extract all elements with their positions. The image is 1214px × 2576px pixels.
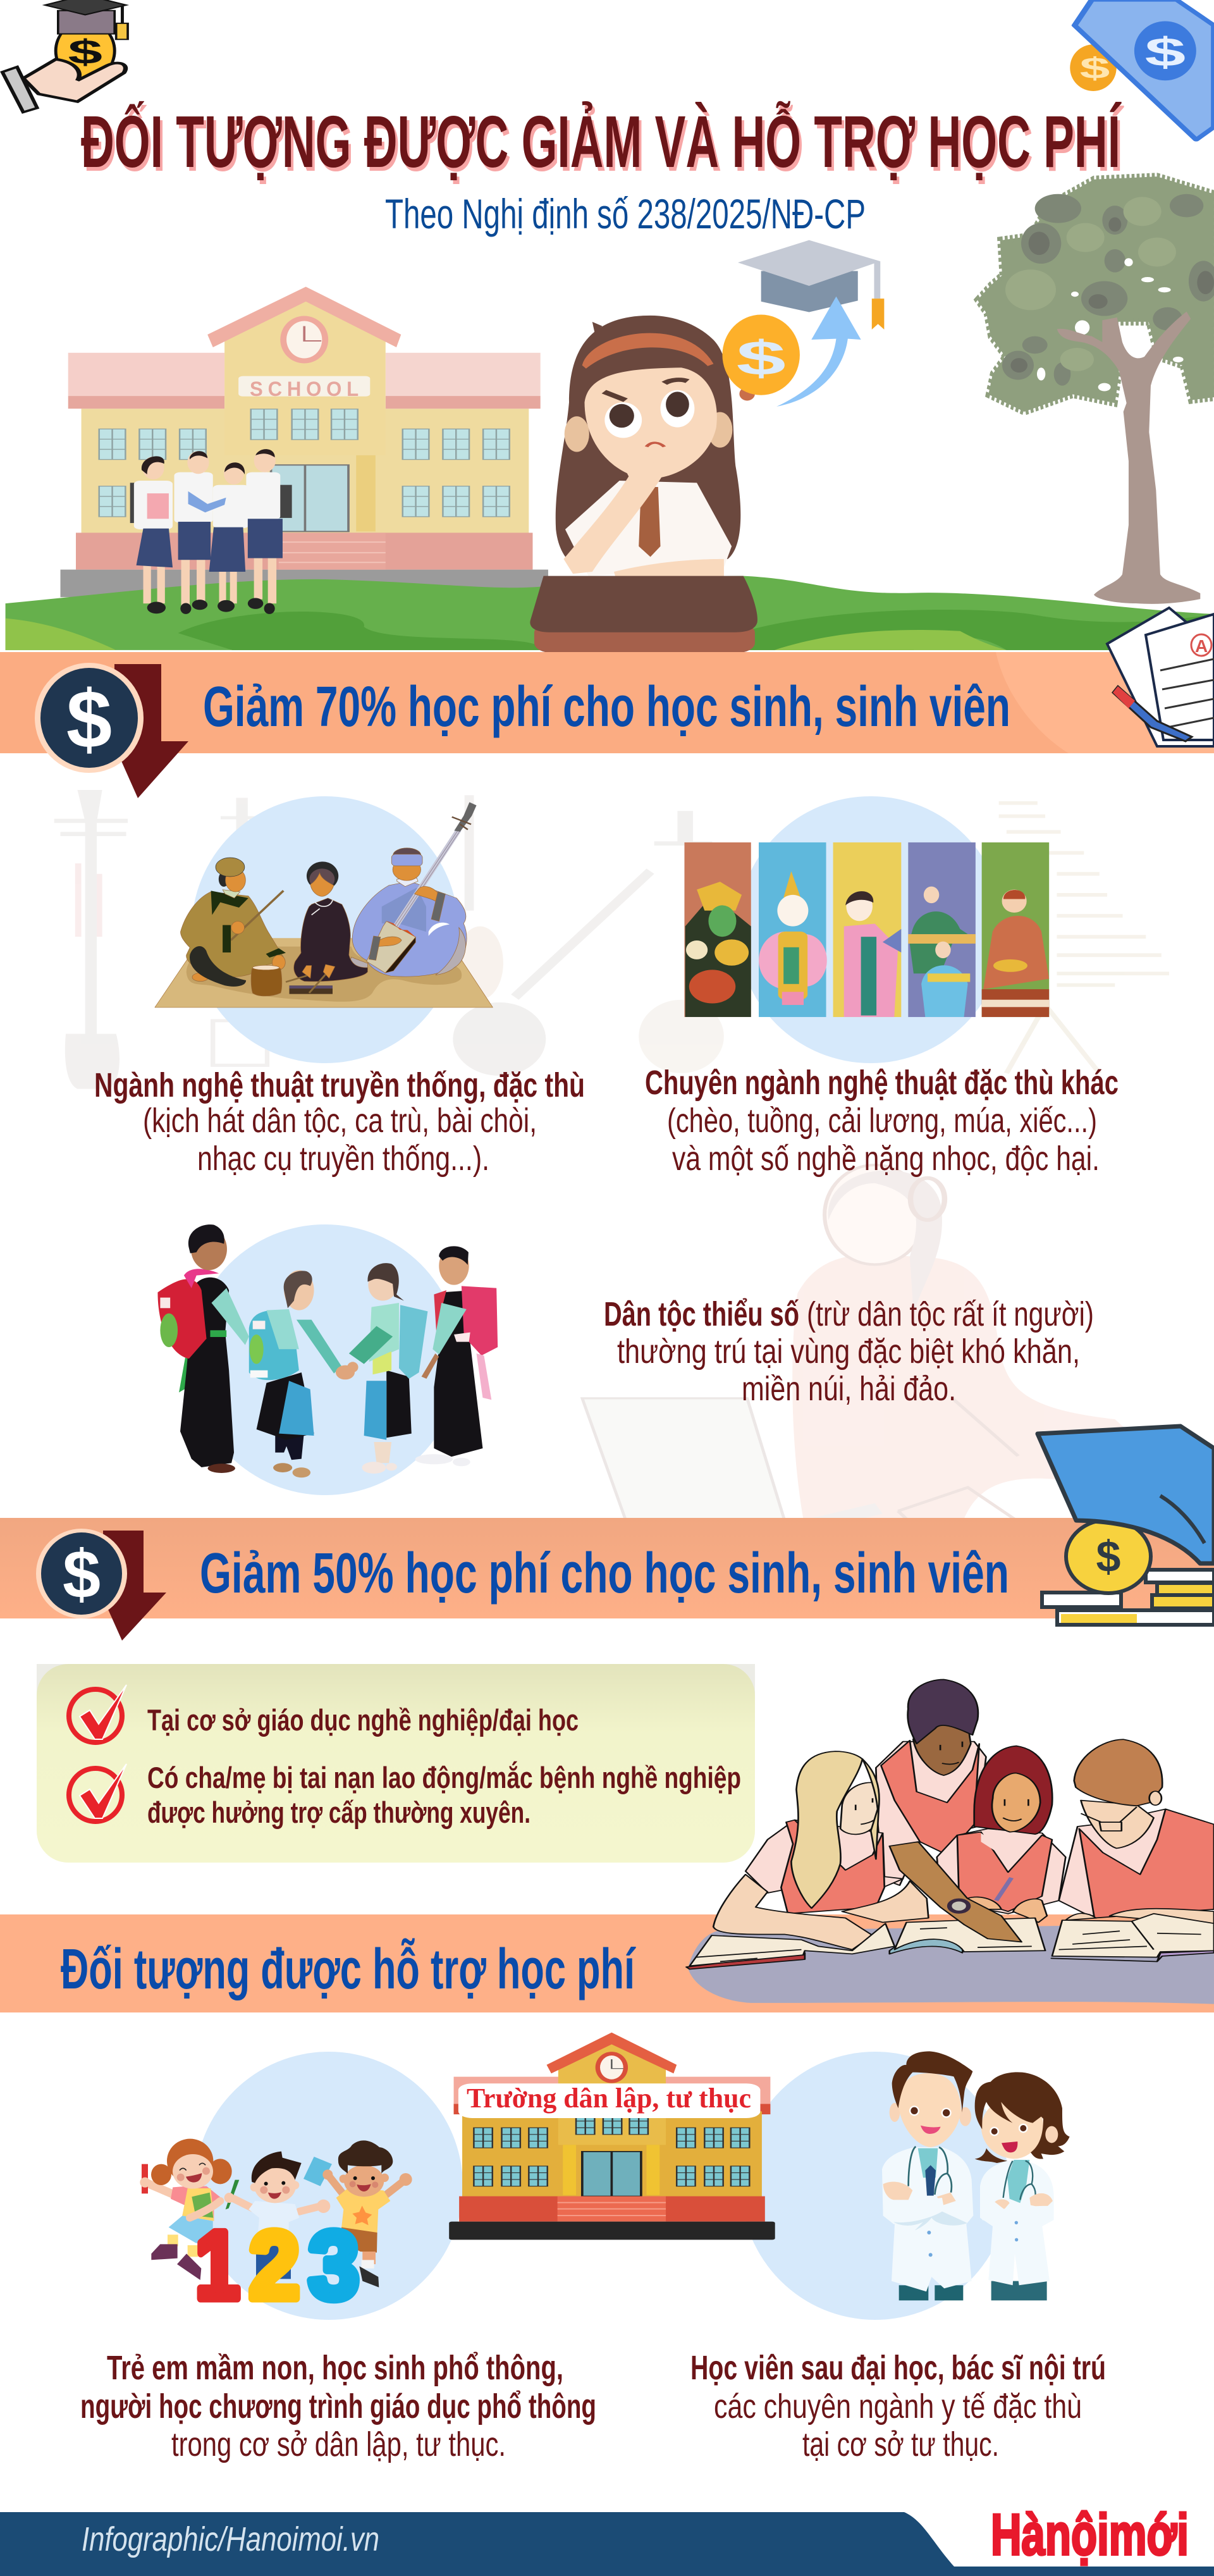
icon: dollar coin: $ <box>63 1536 101 1612</box>
illustration: ca trù musicians <box>155 802 493 1008</box>
circle background <box>195 2052 463 2320</box>
sign text: school: SCHOOL <box>250 378 364 400</box>
caption: thường trú tại vùng đặc biệt khó khăn, <box>617 1333 1080 1371</box>
illustration: tree <box>978 176 1214 604</box>
icon: money bill and coin <box>1070 0 1214 140</box>
panel: other arts <box>645 796 1119 1178</box>
icon: cap, coin and rising arrow: $ <box>737 331 786 386</box>
circle background <box>737 796 1004 1063</box>
illustration: two doctors <box>882 2051 1070 2300</box>
icon: hand holding coin with graduation cap: $ <box>68 33 102 71</box>
watermark: traditional instruments <box>54 790 1169 1089</box>
icon: graduation cap on coins and books <box>1038 1426 1214 1625</box>
illustration: three kids <box>140 2139 412 2288</box>
icon: dollar coin <box>36 1529 127 1618</box>
panel: ethnic minority students <box>157 1224 1094 1495</box>
icon: money bill and coin: $ <box>1080 51 1110 85</box>
icon: dollar coin: $ <box>66 673 112 765</box>
panel: postgraduate and resident doctors <box>690 2051 1106 2463</box>
caption: miền núi, hải đảo. <box>742 1370 956 1408</box>
caption <box>94 1066 585 1178</box>
icon: exam papers and pen: A <box>1195 636 1208 656</box>
subtitle: Theo Nghị định số 238/2025/NĐ-CP <box>385 190 866 237</box>
icon: cap, coin and rising arrow <box>722 240 884 407</box>
circle background <box>741 2052 1009 2320</box>
caption: Ngành nghệ thuật truyền thống, đặc thù <box>94 1066 585 1104</box>
caption <box>690 2349 1106 2463</box>
icon: exam papers and pen <box>1107 608 1214 746</box>
heading: Đối tượng được hỗ trợ học phí <box>61 1937 636 2001</box>
illustration: students studying at table <box>686 1679 1214 2004</box>
icon: check 2 <box>69 1764 126 1821</box>
caption: và một số nghề nặng nhọc, độc hại. <box>672 1140 1100 1178</box>
circle background <box>190 1224 460 1495</box>
icon: down arrow <box>113 664 188 798</box>
illustration: private school building <box>449 2033 775 2240</box>
grass hill <box>6 576 1214 650</box>
icon: money bill and coin: $ <box>1145 29 1186 74</box>
band: đối tượng hỗ trợ <box>0 1914 1214 2012</box>
panel: traditional arts <box>94 796 585 1178</box>
icon: check 1 <box>69 1685 126 1742</box>
list item 1: Tại cơ sở giáo dục nghề nghiệp/đại học <box>147 1703 579 1737</box>
illustration: numbers 123: 3 <box>309 2212 359 2319</box>
illustration: school building <box>61 287 548 597</box>
caption: người học chương trình giáo dục phổ thông <box>80 2388 596 2425</box>
list item 2 <box>147 1761 741 1829</box>
caption: các chuyên ngành y tế đặc thù <box>714 2388 1082 2425</box>
illustration: numbers 123: 1 <box>195 2212 240 2319</box>
label: Trường dân lập, tư thục <box>467 2083 751 2114</box>
list item 2: Có cha/mẹ bị tai nạn lao động/mắc bệnh nghề nghiệp <box>147 1761 741 1794</box>
illustration: four children holding hands <box>157 1224 498 1477</box>
band: giảm 70% <box>0 652 1214 798</box>
caption <box>604 1295 1094 1408</box>
caption: Dân tộc thiểu số <box>604 1295 799 1333</box>
icon: dollar coin <box>35 663 144 773</box>
icon: down arrow <box>101 1531 166 1641</box>
caption <box>80 2349 596 2463</box>
footer <box>0 2503 1214 2576</box>
circle background <box>192 796 458 1063</box>
caption: trong cơ sở dân lập, tư thục. <box>171 2425 506 2463</box>
illustration: thinking schoolgirl <box>530 316 757 653</box>
caption: tại cơ sở tư thục. <box>802 2425 999 2463</box>
illustration: five art panels <box>684 842 1049 1017</box>
caption: (trừ dân tộc rất ít người) <box>807 1295 1094 1333</box>
illustration: numbers 123 <box>195 2212 359 2319</box>
icon: graduation cap on coins and books: $ <box>1096 1532 1120 1581</box>
credit: Infographic/Hanoimoi.vn <box>82 2520 379 2558</box>
caption <box>645 1064 1119 1178</box>
illustration: students group <box>130 449 292 614</box>
band: giảm 50% <box>0 1518 1214 1641</box>
caption: Trẻ em mầm non, học sinh phổ thông, <box>107 2349 563 2387</box>
illustration: numbers 123: 2 <box>249 2212 300 2319</box>
caption: (kịch hát dân tộc, ca trù, bài chòi, <box>143 1102 537 1140</box>
panel: preschool and school students <box>80 2052 596 2463</box>
watermark: woman with laptop <box>582 1165 1138 1538</box>
caption: nhạc cụ truyền thống...). <box>197 1140 489 1178</box>
list item 2: được hưởng trợ cấp thường xuyên. <box>147 1796 530 1829</box>
panel: giảm 50% conditions <box>37 1664 755 1863</box>
icon: hand holding coin with graduation cap <box>3 0 128 112</box>
caption: (chèo, tuồng, cải lương, múa, xiếc...) <box>667 1102 1097 1140</box>
